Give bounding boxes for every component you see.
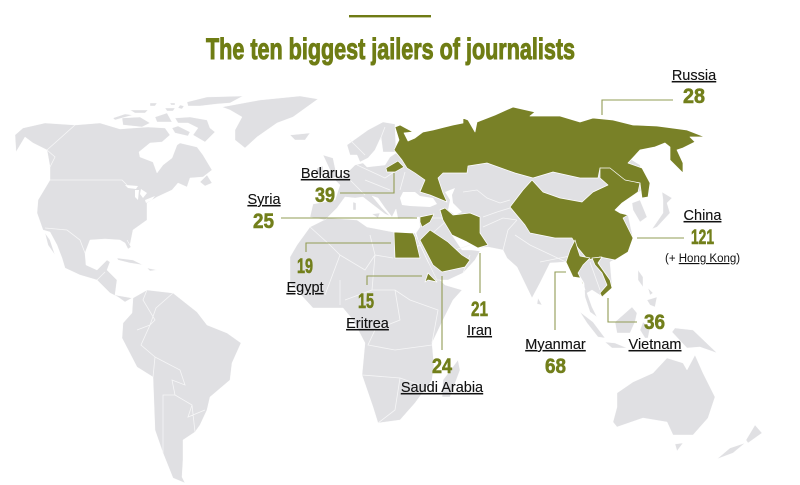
Vietnam <box>592 257 612 297</box>
callout: Syria: 25 <box>253 210 274 233</box>
top rule <box>349 15 431 17</box>
Great Lakes <box>125 185 155 203</box>
Tasmania <box>675 443 683 451</box>
callout: Vietnam: 36 <box>644 311 665 334</box>
callout: Iran: 21 <box>471 298 488 321</box>
callout: China: China <box>684 208 722 224</box>
Eritrea <box>425 273 437 282</box>
New Zealand <box>717 425 762 459</box>
callout: Saudi Arabia: 24 <box>432 355 452 378</box>
callout: Belarus <box>301 166 394 207</box>
Black Sea <box>400 192 437 207</box>
callout: Myanmar <box>525 272 586 378</box>
Greenland <box>222 96 318 148</box>
callout: Egypt <box>286 243 391 296</box>
country borders <box>45 125 600 453</box>
callout: China: (+ Hong Kong) <box>665 253 740 265</box>
callout: Saudi Arabia <box>401 276 484 396</box>
Sri Lanka <box>537 298 542 305</box>
world map base <box>15 96 762 483</box>
Iran <box>440 208 488 248</box>
Belarus <box>386 161 404 172</box>
callout: Egypt: Egypt <box>286 280 324 296</box>
Africa <box>290 218 462 423</box>
Myanmar <box>566 240 590 290</box>
Baja California <box>45 233 55 255</box>
Australia <box>613 355 715 435</box>
callout: Egypt: 19 <box>297 255 313 278</box>
callout: Eritrea: 15 <box>358 290 374 313</box>
Russia <box>394 107 705 202</box>
callout: Eritrea <box>346 276 422 332</box>
Saudi Arabia <box>420 230 470 272</box>
South America <box>122 290 241 483</box>
callout: China <box>637 208 740 265</box>
Japan <box>652 192 672 229</box>
Scandinavia <box>347 122 396 162</box>
North America landmass <box>15 123 212 302</box>
United Kingdom and Ireland <box>316 155 337 180</box>
callout: Russia: Russia <box>672 68 717 84</box>
Mediterranean islands <box>353 202 380 218</box>
Caspian Sea <box>445 188 462 215</box>
callout: Myanmar: Myanmar <box>525 337 586 353</box>
callout: Vietnam: Vietnam <box>629 337 681 353</box>
callout: Russia: 28 <box>683 85 705 108</box>
callout: Iran: Iran <box>467 323 492 339</box>
callout: Belarus: Belarus <box>301 166 350 182</box>
Indonesia and Philippines <box>580 270 717 353</box>
callout: Syria: Syria <box>247 192 281 208</box>
callout: Syria <box>247 192 417 233</box>
Caribbean islands <box>117 258 157 271</box>
callout: Saudi Arabia: Saudi Arabia <box>401 380 484 396</box>
title: The ten biggest jailers of journalists <box>206 33 575 66</box>
callout: Iran <box>467 253 492 339</box>
callout: Eritrea: Eritrea <box>346 316 390 332</box>
Eurasia landmass <box>310 140 648 317</box>
Korea <box>632 200 647 222</box>
callout: Myanmar: 68 <box>545 355 566 378</box>
callout: Belarus: 39 <box>315 184 335 207</box>
Egypt <box>394 232 420 258</box>
Madagascar <box>442 360 460 397</box>
callout: Vietnam <box>608 298 681 353</box>
Iceland <box>290 133 310 140</box>
Arctic islands <box>113 96 243 186</box>
callout: China: 121 <box>691 226 714 249</box>
Syria <box>420 214 434 227</box>
highlighted countries <box>386 107 705 297</box>
China <box>510 168 640 260</box>
callout: Russia <box>602 68 717 115</box>
